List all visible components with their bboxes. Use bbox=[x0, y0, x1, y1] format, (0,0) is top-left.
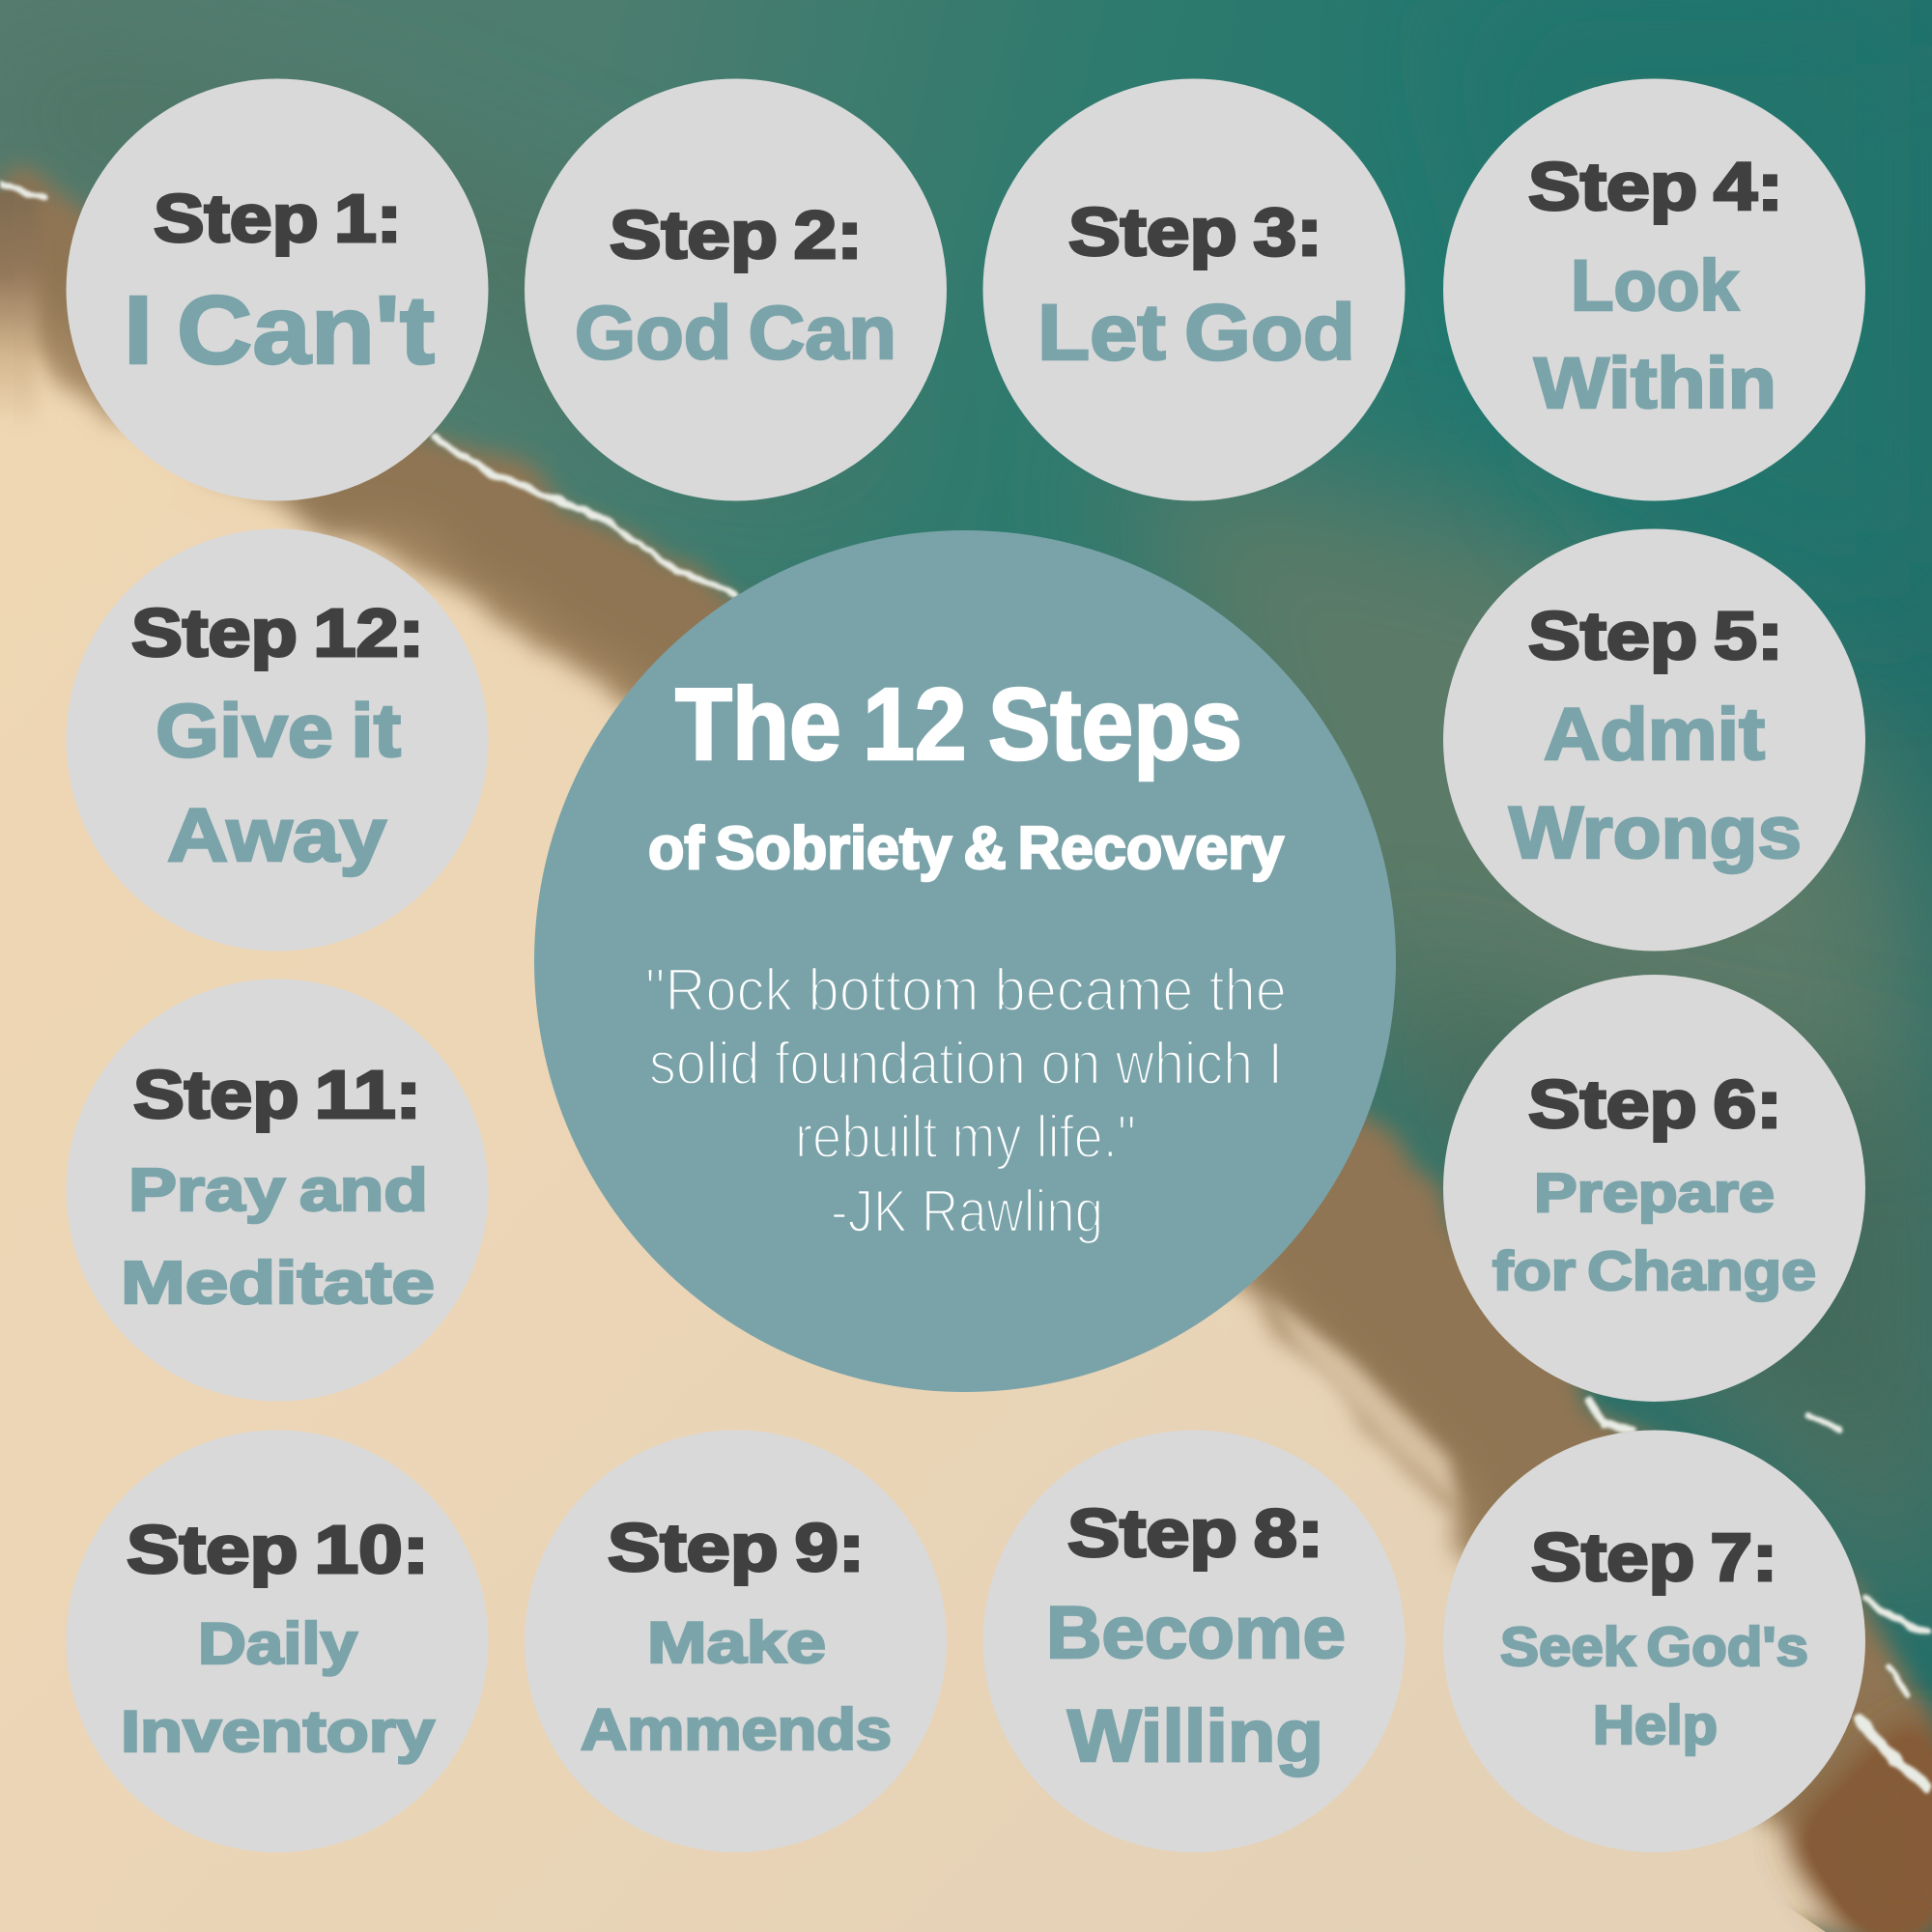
step 11: Meditate bbox=[121, 1250, 435, 1317]
step 12: Give it bbox=[156, 688, 401, 773]
step 5: Wrongs bbox=[1509, 792, 1802, 874]
quote: -JK Rawling bbox=[831, 1179, 1103, 1245]
quote bbox=[645, 957, 1287, 1245]
step 4: Look bbox=[1571, 245, 1740, 326]
step 1: Step 1: bbox=[154, 181, 402, 256]
center panel bbox=[534, 530, 1396, 1392]
step 4 bbox=[1443, 79, 1865, 500]
step 8: Step 8: bbox=[1067, 1495, 1323, 1571]
step 12: Away bbox=[167, 792, 386, 877]
step 2 bbox=[525, 79, 947, 500]
step 12: Step 12: bbox=[131, 595, 424, 670]
step 3 bbox=[983, 79, 1405, 500]
step 10: Inventory bbox=[121, 1699, 436, 1764]
step 3: Let God bbox=[1037, 289, 1355, 377]
step 4: Within bbox=[1534, 343, 1776, 423]
step 11: Step 11: bbox=[133, 1057, 421, 1132]
step 10: Step 10: bbox=[127, 1512, 429, 1587]
step 5: Admit bbox=[1544, 694, 1765, 776]
step 7: Step 7: bbox=[1531, 1520, 1777, 1595]
step 11: Pray and bbox=[128, 1157, 428, 1224]
step 6: Prepare bbox=[1534, 1162, 1775, 1224]
step 9: Make bbox=[647, 1610, 826, 1675]
step 9 bbox=[525, 1430, 947, 1853]
step 10: Daily bbox=[198, 1611, 358, 1676]
step 9: Ammends bbox=[581, 1697, 892, 1762]
quote: solid foundation on which I bbox=[649, 1031, 1283, 1097]
step 1 bbox=[66, 79, 489, 500]
step 7 bbox=[1443, 1430, 1865, 1853]
step 3: Step 3: bbox=[1068, 194, 1322, 270]
step 8: Become bbox=[1046, 1592, 1346, 1674]
title: The 12 Steps bbox=[675, 668, 1242, 781]
step 4: Step 4: bbox=[1528, 149, 1783, 224]
step 6 bbox=[1443, 975, 1865, 1402]
step 2: God Can bbox=[575, 290, 896, 375]
step 10 bbox=[66, 1430, 489, 1853]
quote: "Rock bottom became the bbox=[645, 957, 1287, 1024]
step 6: Step 6: bbox=[1528, 1066, 1782, 1142]
step 5: Step 5: bbox=[1528, 598, 1783, 673]
step 8 bbox=[983, 1430, 1405, 1853]
step 5 bbox=[1443, 529, 1865, 951]
step 7: Help bbox=[1593, 1694, 1718, 1756]
step 9: Step 9: bbox=[608, 1510, 865, 1585]
step 7: Seek God's bbox=[1500, 1616, 1808, 1678]
quote: rebuilt my life." bbox=[795, 1104, 1136, 1171]
step 11 bbox=[66, 980, 489, 1401]
step 8: Willing bbox=[1067, 1695, 1323, 1777]
step 12 bbox=[66, 529, 489, 951]
step 2: Step 2: bbox=[610, 197, 863, 272]
step 6: for Change bbox=[1492, 1240, 1816, 1302]
step 1: I Can't bbox=[124, 276, 435, 384]
subtitle: of Sobriety & Recovery bbox=[648, 815, 1285, 882]
